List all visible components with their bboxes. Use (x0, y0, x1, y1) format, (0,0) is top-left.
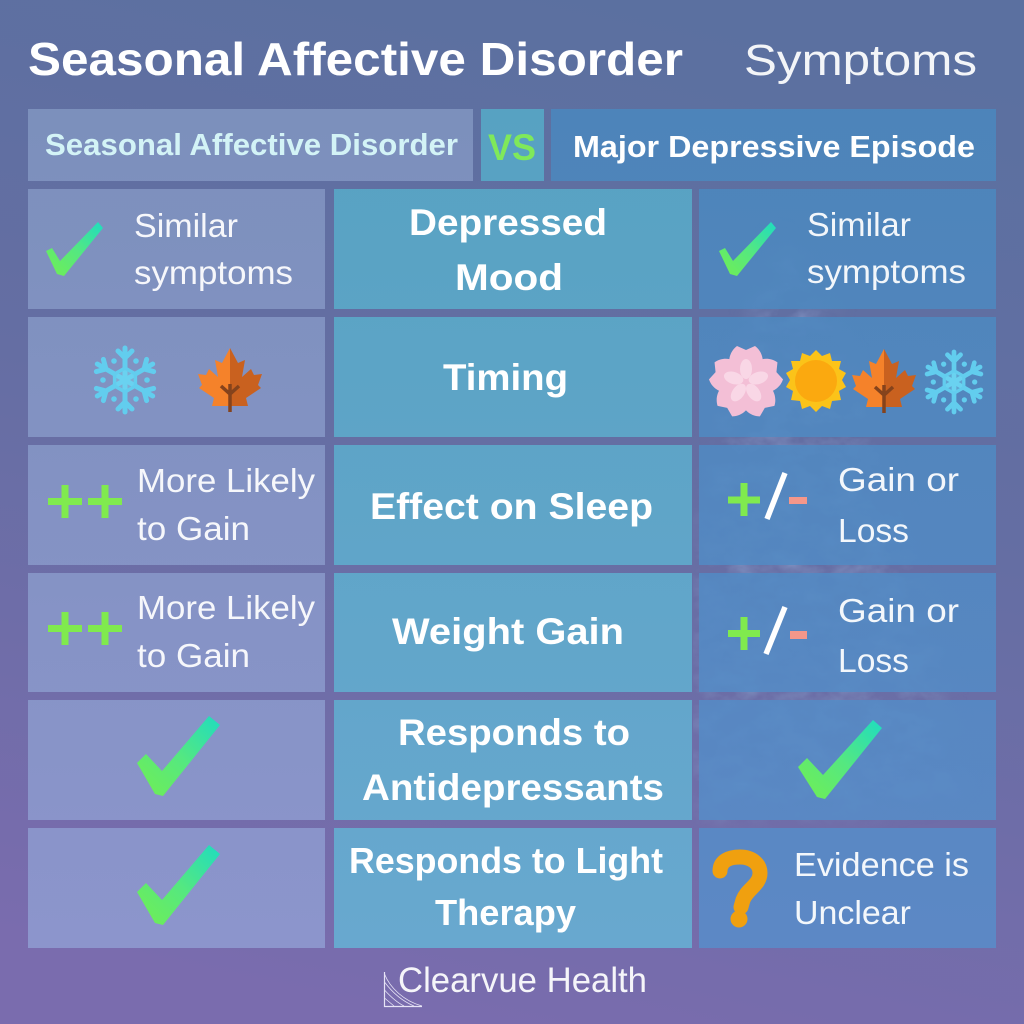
panel: MDE light therapy: Evidence is (794, 846, 969, 883)
panel: SAD similar symptoms: symptoms (134, 254, 293, 291)
icon: question mark (720, 857, 760, 928)
panel: Timing label: Timing (443, 357, 568, 398)
row: Timing (28, 317, 996, 437)
panel: MDE light therapy: Unclear (794, 894, 911, 931)
panel: SAD weight: More Likely (137, 589, 316, 626)
snowy tree background texture (693, 310, 941, 820)
panel: SAD sleep: More Likely (137, 462, 316, 499)
panel: MDE similar symptoms: Similar (807, 206, 911, 243)
icon: sun (786, 350, 846, 412)
panel: MDE similar symptoms (699, 189, 996, 309)
panel: MDE weight: Gain or (838, 592, 959, 629)
panel: Timing label (334, 317, 692, 437)
panel: MDE light therapy (699, 828, 996, 948)
panel: SAD antidepressants (28, 700, 325, 820)
panel: Weight Gain label (334, 573, 692, 692)
panel: SAD light therapy (28, 828, 325, 948)
title: Symptoms (744, 36, 977, 85)
panel: SAD weight: to Gain (137, 637, 250, 674)
panel: MDE sleep (699, 445, 996, 565)
header: Seasonal Affective Disorder (28, 109, 473, 181)
header: Major Depressive Episode: Major Depressive Episode (573, 129, 975, 164)
panel: Responds to Antidepressants label: Antidepressants (362, 767, 664, 808)
panel: Responds to Antidepressants label: Responds to (398, 712, 630, 753)
icon: autumn leaf (852, 349, 916, 413)
icon: plus or minus (728, 473, 807, 519)
panel: Responds to Light Therapy label: Responds to Light (349, 840, 663, 881)
row: Weight Gain (28, 573, 996, 692)
icon: check mark (46, 222, 103, 276)
icon: logo triangle (384, 972, 422, 1006)
panel: MDE sleep: Gain or (838, 461, 959, 498)
panel: MDE weight: Loss (838, 642, 909, 679)
header: VS (481, 109, 544, 181)
panel: SAD similar symptoms: Similar (134, 207, 238, 244)
title: Seasonal Affective Disorder (28, 33, 683, 85)
panel: SAD sleep: to Gain (137, 510, 250, 547)
icon: autumn leaf (198, 348, 262, 412)
icon: check mark (798, 720, 882, 799)
logo: Clearvue Health: Clearvue Health (398, 961, 647, 1000)
icon: snowflake (925, 352, 983, 412)
header: Seasonal Affective Disorder: Seasonal Affective Disorder (45, 127, 458, 162)
icon: plus or minus (728, 607, 807, 654)
panel: Depressed Mood label: Mood (455, 257, 563, 298)
panel: MDE timing (699, 317, 996, 437)
title (28, 33, 977, 85)
panel: Responds to Antidepressants label (334, 700, 692, 820)
icon: snowflake (94, 348, 156, 412)
panel: SAD timing (28, 317, 325, 437)
panel: MDE weight (699, 573, 996, 692)
panel: Weight Gain label: Weight Gain (392, 611, 624, 652)
panel: Responds to Light Therapy label (334, 828, 692, 948)
panel: SAD sleep (28, 445, 325, 565)
panel: Effect on Sleep label: Effect on Sleep (370, 486, 653, 527)
row: Responds to Light Therapy (28, 828, 996, 948)
header: VS: VS (488, 127, 536, 168)
panel: Depressed Mood label: Depressed (409, 202, 607, 243)
panel: MDE similar symptoms: symptoms (807, 253, 966, 290)
icon: blossom (707, 346, 785, 421)
header row: comparison labels (28, 109, 996, 181)
row: Effect on Sleep (28, 445, 996, 565)
panel: SAD weight (28, 573, 325, 692)
panel: SAD similar symptoms (28, 189, 325, 309)
header: Major Depressive Episode (551, 109, 996, 181)
panel: Depressed Mood label (334, 189, 692, 309)
icon: check mark (137, 716, 220, 796)
panel: MDE antidepressants (699, 700, 996, 820)
icon: check mark (719, 222, 776, 276)
panel: Effect on Sleep label (334, 445, 692, 565)
row: Depressed Mood (28, 189, 996, 309)
icon: double plus (48, 485, 122, 518)
panel: Responds to Light Therapy label: Therapy (435, 892, 576, 933)
row: Responds to Antidepressants (28, 700, 996, 820)
panel: MDE sleep: Loss (838, 512, 909, 549)
icon: double plus (48, 612, 122, 645)
icon: check mark (137, 845, 220, 925)
